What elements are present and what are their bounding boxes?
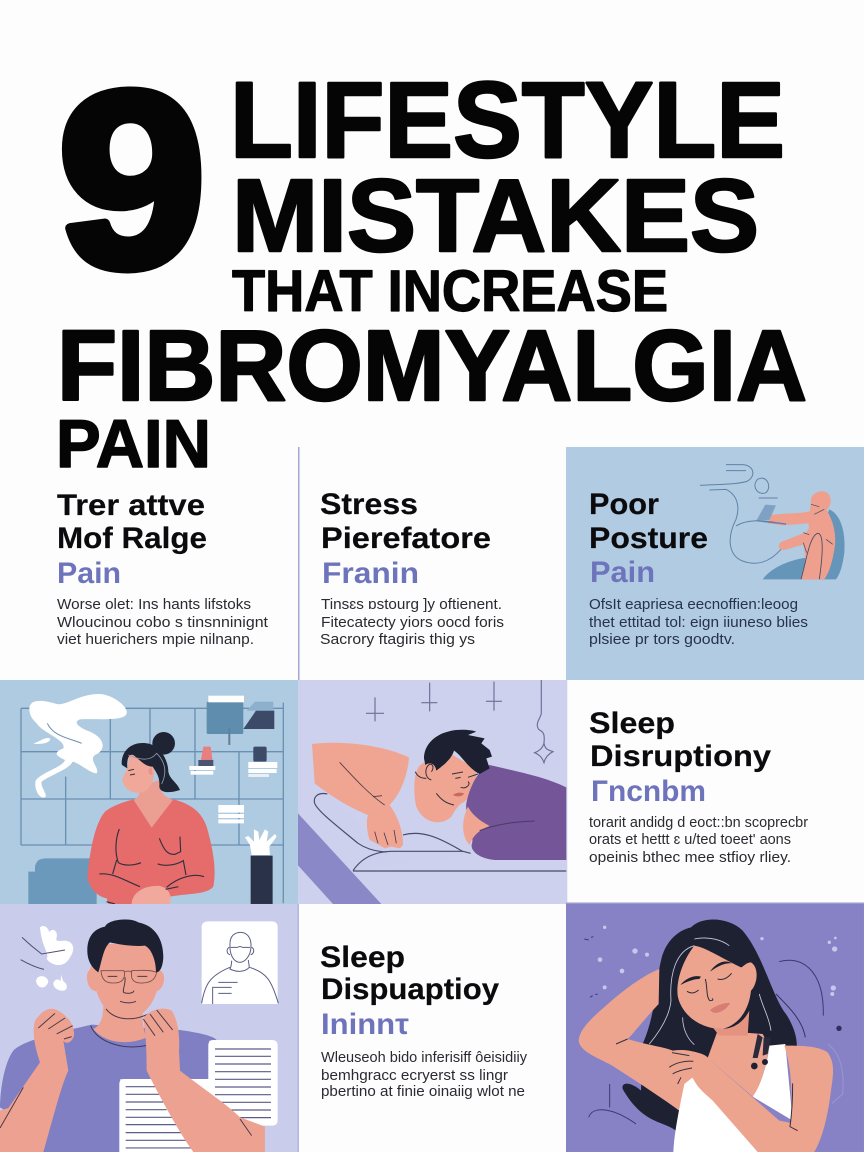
face xyxy=(677,946,757,1029)
body xyxy=(0,1025,217,1152)
body text: opeinis bthec mee stfioy rliey. xyxy=(589,850,791,866)
body text: Worse olet: Ins hants lifstoks xyxy=(57,597,251,613)
neck and head xyxy=(93,1004,147,1042)
panel: man lying on bed xyxy=(298,680,567,904)
hair highlights and face details xyxy=(649,938,771,1045)
subheading: Pain xyxy=(57,557,121,590)
face xyxy=(414,750,476,822)
body text: pbertino at finie oinaiig wlot ne xyxy=(321,1084,525,1100)
body text xyxy=(320,597,504,648)
swirl icon xyxy=(40,926,73,965)
body text: bemhgracc ecryerst ss lingr xyxy=(321,1068,508,1084)
title line: pain: PAIN xyxy=(56,406,211,482)
body xyxy=(466,765,566,860)
subheading: Franin xyxy=(322,557,419,590)
shelf items xyxy=(207,702,243,734)
heading xyxy=(320,488,491,555)
stars xyxy=(366,680,553,763)
dots xyxy=(598,926,837,996)
title xyxy=(56,40,807,482)
panel: man with glasses and papers xyxy=(0,904,298,1152)
heading: Disruptiony xyxy=(590,740,771,773)
heading: Poor xyxy=(589,488,659,521)
illustration: person slouching in chair xyxy=(700,465,845,579)
body text: orats et hettt ɛ u/ted toeet' aons xyxy=(589,832,791,848)
heading: Stress xyxy=(320,488,418,521)
woman xyxy=(132,780,173,828)
body text: plsiee pr tors goodtv. xyxy=(589,632,735,648)
top xyxy=(673,1077,758,1152)
panel: woman with smoke xyxy=(0,680,298,904)
hand xyxy=(669,1051,712,1094)
heading xyxy=(320,941,499,1006)
hair xyxy=(622,920,797,1131)
title line: lifestyle: LIFESTYLE xyxy=(230,59,785,180)
heading: Trer attve xyxy=(57,489,205,522)
title line: fibromyalgia: FIBROMYALGIA xyxy=(57,310,807,422)
row divider xyxy=(566,902,864,904)
panel: sleep disruption xyxy=(589,707,808,866)
sofa xyxy=(28,858,97,904)
panel: woman resting head xyxy=(566,904,864,1152)
panel: text one xyxy=(57,489,268,648)
body text: OfsIt eapriesa eecnoffien:leoog xyxy=(589,597,798,613)
body text: thet ettitad tol: eign iiuneso blies xyxy=(589,615,808,631)
right arm and hand xyxy=(143,1009,265,1152)
panel: text two xyxy=(320,488,504,648)
heading: Sleep xyxy=(589,707,675,740)
heading: Posture xyxy=(589,522,708,555)
heading xyxy=(589,707,771,773)
hand and post xyxy=(245,829,277,855)
curves xyxy=(584,937,823,1124)
portrait card xyxy=(202,921,278,1004)
body text xyxy=(321,1050,528,1100)
body text: viet huerichers mpie nilnanp. xyxy=(57,632,254,648)
smoke xyxy=(29,694,127,798)
papers xyxy=(208,1040,278,1126)
body text: torarit andidg d eoct::bn scoprecbr xyxy=(589,815,808,831)
divider xyxy=(298,447,300,680)
body text: Sacrory ftagiris thig ys xyxy=(320,632,475,648)
body text: Wleuseoh bido inferisiff ôeisidiiy xyxy=(321,1050,528,1066)
necklace xyxy=(753,1034,771,1058)
body text: Fitecatecty yiors oocd foris xyxy=(321,615,504,631)
left arm xyxy=(0,1009,74,1152)
heading: Mof Ralge xyxy=(57,522,207,555)
body text: Wloucinou cobo s tinsnninignt xyxy=(57,615,268,631)
title line: that increase: THAT INCREASE xyxy=(232,259,668,324)
heading: Dispuaptioy xyxy=(321,973,499,1006)
body text xyxy=(589,815,808,866)
hair xyxy=(424,730,492,774)
subheading: Ininnτ xyxy=(321,1008,409,1041)
body text xyxy=(589,597,808,648)
chest and shoulder xyxy=(708,1031,769,1097)
subheading: Гncnbm xyxy=(591,775,706,808)
heading xyxy=(57,489,207,555)
body text xyxy=(57,597,268,648)
heading xyxy=(589,488,708,555)
panel: poor posture xyxy=(566,447,864,680)
heading: Sleep xyxy=(320,941,405,974)
column divider xyxy=(298,904,299,1152)
heading: Pierefatore xyxy=(321,522,491,555)
bed xyxy=(298,813,381,904)
subheading: Pain xyxy=(590,556,655,589)
panel: sleep disruption two xyxy=(320,941,528,1100)
arm raised xyxy=(579,969,796,1152)
arm xyxy=(312,743,409,848)
grid lines xyxy=(21,703,283,903)
big number 9: 9 xyxy=(58,40,206,319)
title line: mistakes: MISTAKES xyxy=(232,158,759,273)
glasses and face xyxy=(101,970,157,983)
body text: Tinsɛs ɒstourg ]y oftienent. xyxy=(321,597,502,613)
facial details xyxy=(415,764,478,805)
